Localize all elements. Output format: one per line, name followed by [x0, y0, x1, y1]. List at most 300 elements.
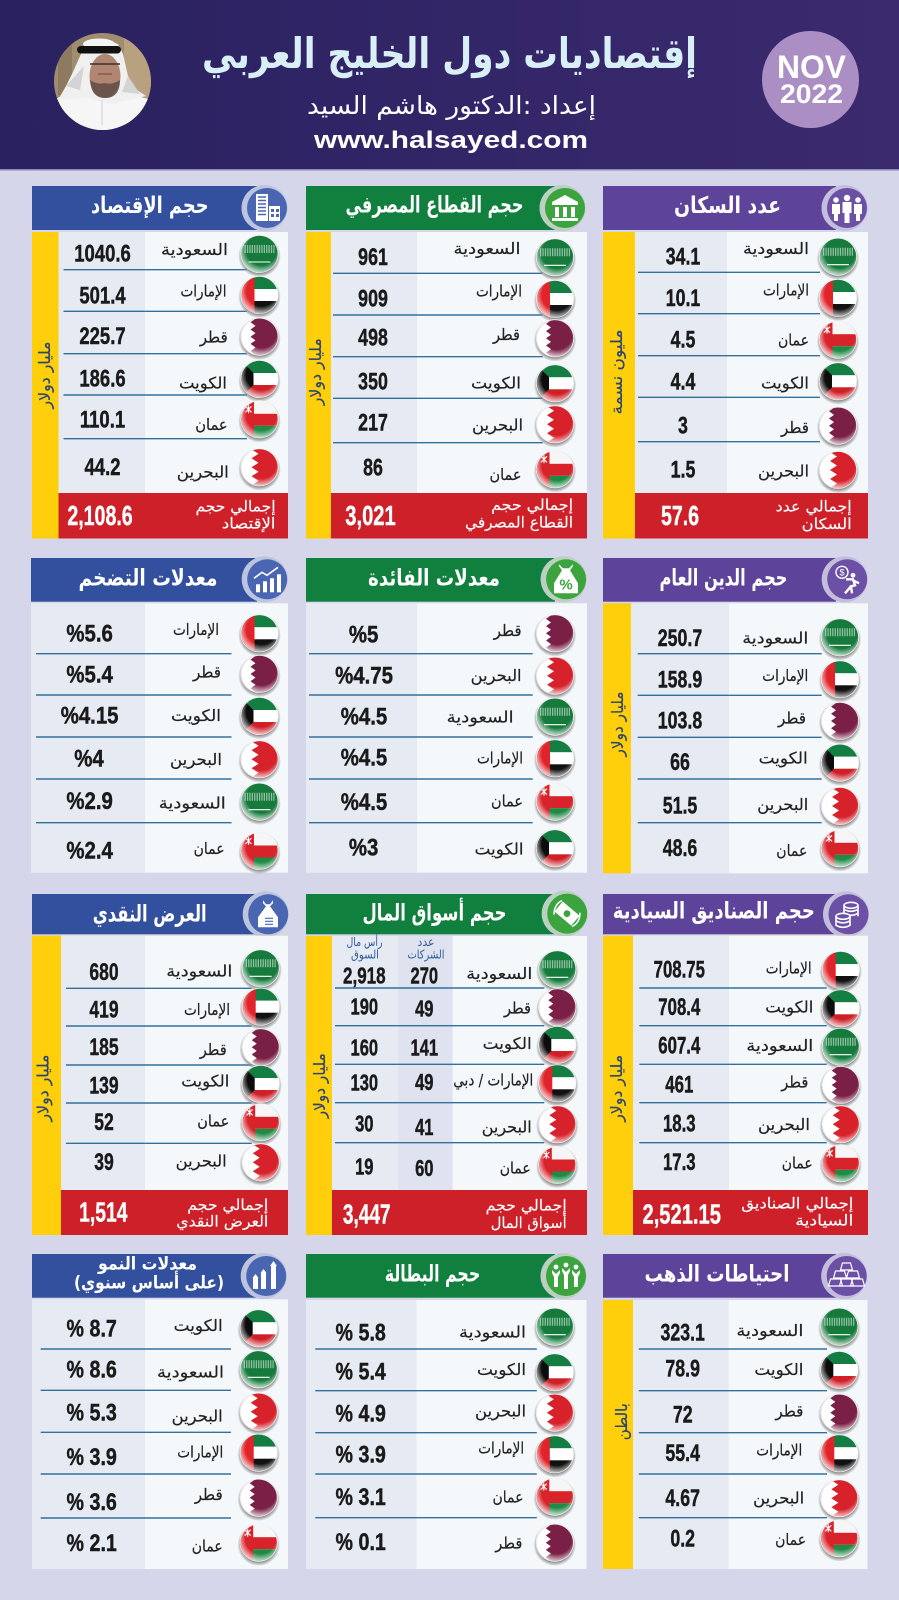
panel heading: معدلات التضخم	[78, 566, 218, 592]
row: الإمارات: الإمارات	[173, 620, 219, 640]
panel heading: حجم أسواق المال	[362, 897, 506, 927]
panel heading: العرض النقدي	[93, 902, 207, 928]
row: الإمارات: الإمارات	[762, 666, 808, 686]
row: الإمارات	[665, 1434, 860, 1476]
row: البحرين: 39	[94, 1149, 114, 1176]
row: الإمارات	[654, 951, 862, 993]
panel heading	[603, 556, 868, 602]
row: الكويت: %3	[349, 834, 378, 861]
panel heading	[306, 1253, 586, 1299]
row: عمان: 110.1	[80, 406, 125, 433]
unit label: مليار دولار	[306, 338, 326, 406]
row: الإمارات / دبي: 49	[415, 1070, 434, 1096]
row: الإمارات: %4.5	[341, 744, 387, 771]
column heading: companies: عدد	[418, 935, 434, 949]
row: الإمارات: % 3.9	[67, 1443, 117, 1470]
row: البحرين	[665, 1479, 860, 1521]
row: الكويت: 78.9	[665, 1356, 700, 1382]
row: الإمارات: الإمارات	[177, 1442, 223, 1462]
row: الكويت: 139	[89, 1073, 119, 1099]
row: السعودية: 961	[358, 245, 388, 271]
row: البحرين: % 4.9	[336, 1400, 386, 1427]
row: البحرين: 41	[415, 1115, 434, 1141]
row: الكويت	[670, 744, 861, 786]
date badge	[762, 31, 859, 128]
row: الإمارات: الإمارات	[180, 282, 226, 302]
table body	[32, 1299, 288, 1569]
row: الإمارات: الإمارات	[184, 1000, 230, 1020]
row: الكويت: الكويت	[171, 706, 221, 726]
row: عمان: عمان	[197, 1112, 229, 1131]
panel: حجم البطالة	[306, 1253, 586, 1569]
row: قطر: قطر	[780, 1072, 808, 1092]
table body	[32, 232, 288, 538]
row: البحرين: % 5.3	[67, 1399, 117, 1426]
total bar: 57.6	[661, 501, 699, 532]
total bar: 2,521.15	[642, 1199, 721, 1230]
row: الكويت	[358, 364, 576, 406]
row: البحرين: البحرين	[753, 1488, 804, 1508]
row: البحرين	[336, 1394, 576, 1436]
row: البحرين: 1.5	[671, 457, 696, 483]
row: قطر	[358, 319, 576, 361]
row: السعودية: 2,918	[343, 964, 386, 989]
icon: debt runner: $	[839, 568, 845, 578]
row: السعودية: السعودية	[157, 1363, 224, 1383]
row: البحرين	[67, 1393, 280, 1435]
icon: percent bag: %	[559, 576, 573, 593]
row: عمان	[66, 832, 280, 874]
row: البحرين: البحرين	[176, 1152, 227, 1172]
icon: percent bag	[541, 556, 587, 602]
date badge: NOV	[777, 49, 847, 85]
row: قطر: 498	[358, 325, 388, 351]
row: قطر: قطر	[494, 1533, 522, 1553]
icon: buildings	[242, 185, 288, 231]
row: عمان	[663, 1144, 862, 1186]
row: عمان	[363, 450, 576, 492]
row: السعودية	[660, 1308, 860, 1350]
row: السعودية	[74, 235, 280, 277]
row: عمان	[94, 1103, 282, 1145]
row: البحرين: 18.3	[663, 1111, 696, 1137]
unit label: مليار دولار	[35, 341, 55, 409]
icon: gold bars	[821, 1253, 867, 1299]
row: عمان: عمان	[194, 839, 225, 858]
total bar: الإقتصاد	[222, 514, 276, 532]
row: السعودية	[341, 698, 576, 740]
row: الكويت: %4.15	[61, 702, 119, 729]
row: قطر: قطر	[777, 708, 806, 728]
total bar: 1,514	[79, 1197, 128, 1229]
row: السعودية: السعودية	[466, 964, 532, 984]
panel heading: حجم الدين العام	[660, 566, 788, 592]
row: البحرين	[663, 787, 861, 829]
row: عمان: %4.5	[341, 788, 387, 815]
total bar	[633, 1190, 868, 1235]
row: السعودية: 323.1	[660, 1320, 705, 1346]
row: البحرين	[355, 1105, 578, 1147]
row: الكويت	[67, 1309, 280, 1351]
row: قطر: 461	[665, 1071, 693, 1098]
row: الإمارات	[658, 660, 861, 702]
row: الإمارات	[67, 1434, 280, 1476]
row: البحرين: البحرين	[172, 1407, 223, 1427]
panel heading: معدلات الفائدة	[368, 566, 500, 592]
row: عمان	[341, 783, 576, 825]
row: عمان: 52	[94, 1109, 114, 1136]
row: السعودية: السعودية	[742, 628, 808, 648]
total bar: السيادية	[795, 1212, 853, 1230]
row: السعودية	[89, 949, 282, 991]
icon: coins	[823, 891, 869, 937]
panel heading	[306, 185, 586, 231]
row: البحرين: 44.2	[85, 454, 121, 481]
row: قطر: %5.4	[66, 661, 113, 688]
row: السعودية: السعودية	[743, 239, 809, 259]
row: قطر	[336, 1524, 576, 1566]
total bar: إجمالي حجم	[491, 496, 573, 515]
row: عمان: عمان	[776, 841, 807, 860]
row: الإمارات	[336, 1435, 576, 1477]
row: السعودية	[658, 1028, 862, 1070]
row: قطر: 49	[415, 997, 434, 1022]
row: الكويت: الكويت	[759, 748, 808, 768]
unit label: مليار دولار	[310, 1053, 330, 1119]
row: الإمارات: 501.4	[79, 282, 126, 309]
table body	[603, 936, 868, 1235]
row: الإمارات	[79, 276, 281, 318]
row: الكويت: 350	[358, 369, 388, 395]
panel: عدد السكان	[603, 185, 868, 538]
panel heading: حجم القطاع المصرفي	[346, 193, 524, 219]
panel heading: عدد السكان	[674, 193, 781, 219]
icon: growth bars	[241, 1253, 287, 1299]
row: الإمارات: 419	[89, 997, 119, 1023]
total bar: إجمالي حجم	[187, 1196, 268, 1215]
row: عمان: 0.2	[670, 1526, 695, 1552]
row: السعودية: %2.9	[66, 787, 113, 814]
row: البحرين	[671, 451, 859, 493]
row: الكويت: الكويت	[471, 373, 521, 393]
row: عمان	[336, 1478, 576, 1520]
row: قطر: % 3.6	[67, 1488, 117, 1515]
row: قطر: قطر	[492, 325, 520, 345]
table body	[306, 936, 587, 1235]
unit label: مليار دولار	[607, 1055, 627, 1123]
panel heading	[603, 891, 869, 937]
row: الكويت	[349, 829, 576, 871]
row: عمان: 48.6	[663, 836, 697, 862]
row: البحرين: البحرين	[471, 666, 522, 686]
row: عمان: عمان	[775, 1530, 806, 1549]
row: عمان: 19	[355, 1155, 374, 1180]
row: السعودية	[343, 950, 578, 992]
icon: people	[822, 185, 868, 231]
row: السعودية: %4.5	[341, 703, 387, 730]
table body	[31, 603, 288, 873]
portrait photo	[50, 33, 155, 132]
row: قطر: قطر	[194, 1485, 223, 1505]
row: عمان: 60	[415, 1156, 434, 1182]
row: قطر	[658, 702, 861, 744]
row: قطر	[89, 1028, 282, 1070]
total bar: القطاع المصرفي	[465, 513, 573, 532]
row: الإمارات	[666, 279, 859, 321]
row: الكويت	[665, 1351, 860, 1393]
total bar	[58, 493, 288, 538]
row: السعودية: السعودية	[161, 240, 228, 260]
row: السعودية: السعودية	[159, 793, 226, 813]
panel heading	[32, 1253, 287, 1299]
row: البحرين	[663, 1105, 862, 1147]
row: عمان: % 3.1	[336, 1483, 386, 1510]
total bar: إجمالي الصناديق	[741, 1194, 853, 1213]
row: عمان	[355, 1146, 578, 1188]
row: قطر: %5	[349, 621, 378, 648]
row: السعودية: السعودية	[447, 708, 514, 728]
panel heading	[603, 1253, 867, 1299]
row: الكويت	[658, 989, 862, 1031]
row: البحرين	[335, 657, 576, 699]
table body	[306, 603, 587, 873]
row: البحرين: البحرين	[482, 1117, 532, 1137]
row: السعودية: % 8.6	[67, 1355, 117, 1383]
row: عمان: عمان	[492, 1487, 524, 1506]
row: عمان: عمان	[490, 465, 522, 484]
row: الكويت: 66	[670, 750, 690, 776]
unit label: مليار دولار	[34, 1054, 54, 1122]
header banner	[0, 0, 899, 170]
panel: معدلات النمو	[32, 1253, 288, 1569]
row: الكويت: 141	[410, 1036, 438, 1061]
row: السعودية: 1040.6	[74, 240, 131, 267]
table body	[603, 603, 868, 873]
total bar: 3,447	[343, 1199, 391, 1230]
row: الكويت	[79, 360, 281, 402]
row: السعودية: 250.7	[658, 626, 702, 652]
row: السعودية	[67, 1350, 280, 1392]
row: الكويت: الكويت	[754, 1360, 803, 1380]
table body	[306, 232, 587, 538]
total bar	[61, 1190, 288, 1235]
panel heading	[32, 891, 289, 937]
row: قطر: 190	[350, 995, 378, 1020]
row: السعودية	[66, 783, 280, 825]
row: الإمارات: الإمارات	[763, 281, 809, 301]
row: الإمارات	[341, 739, 576, 781]
row: البحرين: البحرين	[472, 416, 523, 436]
row: قطر	[67, 1479, 280, 1521]
row: عمان: 86	[363, 455, 383, 481]
row: السعودية: السعودية	[459, 1322, 526, 1342]
unit label: بالطن	[612, 1403, 632, 1440]
row: قطر	[665, 1066, 862, 1108]
row: الإمارات	[358, 280, 576, 322]
total bar: السكان	[802, 515, 852, 533]
row: الإمارات	[89, 988, 282, 1030]
row: السعودية	[336, 1308, 576, 1350]
panel heading	[31, 556, 288, 602]
icon: debt runner	[822, 556, 868, 602]
panel heading	[306, 556, 587, 602]
row: الكويت: % 5.4	[336, 1357, 387, 1385]
title: إقتصاديات دول الخليج العربي	[202, 29, 697, 79]
row: البحرين: البحرين	[758, 1115, 810, 1135]
row: البحرين	[85, 448, 280, 490]
row: البحرين: البحرين	[758, 462, 809, 482]
row: عمان: عمان	[491, 792, 523, 811]
row: السعودية: 270	[410, 964, 438, 989]
panel: العرض النقدي	[32, 891, 289, 1235]
total bar: 2,108.6	[67, 501, 133, 532]
panel heading	[603, 185, 868, 231]
total bar: إجمالي حجم	[486, 1197, 567, 1216]
row: البحرين: 4.67	[665, 1486, 700, 1512]
panel: حجم الإقتصاد	[32, 185, 288, 538]
total bar: إجمالي عدد	[776, 498, 852, 517]
column heading: market cap	[346, 934, 383, 962]
row: البحرين: %4.75	[335, 662, 393, 689]
row: الكويت: الكويت	[765, 997, 813, 1017]
row: قطر: قطر	[774, 1402, 803, 1422]
row: السعودية	[358, 238, 576, 280]
row: السعودية: 34.1	[666, 244, 700, 270]
row: عمان	[670, 1519, 860, 1561]
row: قطر: % 0.1	[336, 1528, 386, 1555]
author line: إعداد :الدكتور هاشم السيد	[307, 91, 596, 121]
row: الإمارات: 158.9	[658, 667, 702, 693]
panel: معدلات التضخم	[31, 556, 288, 874]
row: الإمارات: الإمارات	[766, 958, 812, 978]
row: الإمارات: 708.75	[654, 957, 705, 983]
row: الكويت: الكويت	[477, 1360, 526, 1380]
row: السعودية: 680	[89, 959, 119, 986]
row: قطر: قطر	[199, 327, 228, 347]
row: عمان: 17.3	[663, 1149, 696, 1176]
icon: bank	[540, 185, 586, 231]
row: عمان: عمان	[782, 1153, 813, 1172]
row: الكويت: الكويت	[174, 1316, 223, 1336]
column heading: market cap: رأس مال	[346, 934, 383, 950]
row: الكويت: الكويت	[474, 839, 524, 859]
row: الكويت: الكويت	[181, 1072, 229, 1092]
row: السعودية: 607.4	[658, 1032, 701, 1059]
row: السعودية: % 5.8	[336, 1319, 386, 1346]
row: السعودية: السعودية	[166, 962, 232, 982]
panel heading	[32, 185, 288, 231]
table body	[603, 232, 868, 538]
row: السعودية: السعودية	[454, 239, 520, 259]
total bar: 3,021	[345, 501, 396, 532]
panel heading: حجم الصناديق السيادية	[613, 898, 815, 924]
icon: rising chart	[242, 556, 288, 602]
total bar: أسواق المال	[491, 1213, 567, 1232]
row: الإمارات / دبي: الإمارات / دبي	[453, 1071, 533, 1091]
row: الكويت: 708.4	[658, 994, 701, 1021]
row: السعودية: السعودية	[736, 1321, 803, 1341]
table body	[32, 936, 288, 1235]
row: عمان: عمان	[500, 1158, 531, 1177]
column heading: companies: الشركات	[408, 947, 444, 962]
row: الكويت: الكويت	[483, 1034, 532, 1054]
row: عمان	[663, 829, 861, 871]
row: قطر	[79, 318, 281, 360]
row: الكويت: الكويت	[179, 373, 227, 393]
panel: احتياطات الذهب	[603, 1253, 868, 1569]
row: قطر	[349, 614, 576, 656]
row: قطر	[678, 407, 859, 449]
icon: money exchange	[542, 891, 588, 937]
row: البحرين: 30	[355, 1112, 374, 1137]
row: قطر: 3	[678, 413, 688, 439]
table body	[603, 1300, 868, 1569]
row: الكويت: 160	[350, 1036, 378, 1061]
panel: حجم أسواق المال	[306, 891, 588, 1235]
row: عمان	[671, 321, 859, 363]
row: البحرين: البحرين	[170, 750, 222, 770]
row: الإمارات: الإمارات	[478, 1438, 524, 1458]
row: الكويت	[336, 1353, 576, 1395]
row: الإمارات / دبي: 130	[350, 1071, 378, 1096]
panel: حجم الدين العام	[603, 556, 868, 873]
total bar: إجمالي حجم	[196, 498, 276, 517]
row: السعودية: السعودية	[746, 1036, 813, 1056]
row: السعودية	[658, 618, 861, 660]
row: الكويت: 186.6	[79, 365, 126, 392]
row: عمان: %2.4	[66, 837, 113, 864]
icon: money bag	[243, 891, 289, 937]
row: قطر	[350, 988, 578, 1030]
panel heading: (على أساس سنوي)	[74, 1270, 224, 1293]
row: قطر: 103.8	[658, 708, 702, 734]
row: قطر: 72	[673, 1402, 693, 1428]
row: البحرين	[94, 1143, 282, 1185]
row: الإمارات: الإمارات	[477, 748, 523, 768]
row: الكويت	[89, 1065, 282, 1107]
row: الكويت: الكويت	[761, 373, 809, 393]
row: عمان	[80, 400, 280, 442]
panel heading: معدلات النمو	[97, 1253, 197, 1274]
row: الإمارات: 55.4	[665, 1441, 700, 1467]
row: عمان	[67, 1524, 280, 1566]
date badge: 2022	[780, 79, 843, 109]
row: قطر: قطر	[780, 418, 809, 438]
row: الإمارات: 909	[358, 286, 388, 312]
row: الإمارات: %5.6	[66, 620, 113, 647]
icon: unemployed people	[540, 1253, 586, 1299]
row: البحرين: البحرين	[177, 462, 229, 482]
panel: حجم الصناديق السيادية	[603, 891, 869, 1235]
panel: حجم القطاع المصرفي	[306, 185, 587, 538]
row: الكويت: 4.4	[671, 369, 696, 395]
row: قطر: 225.7	[79, 323, 126, 350]
unit label: مليون نسمة	[607, 330, 627, 414]
row: قطر: قطر	[192, 663, 221, 683]
total bar	[635, 493, 868, 538]
panel heading: حجم الإقتصاد	[91, 193, 209, 219]
panel heading: احتياطات الذهب	[644, 1262, 790, 1288]
row: الكويت	[350, 1026, 578, 1068]
row: عمان: % 2.1	[67, 1529, 117, 1556]
row: عمان: عمان	[195, 415, 228, 434]
row: البحرين: البحرين	[757, 795, 808, 815]
row: البحرين	[358, 405, 576, 447]
row: البحرين: 51.5	[663, 793, 697, 819]
row: قطر: قطر	[503, 998, 531, 1018]
row: قطر: قطر	[199, 1040, 227, 1060]
row: البحرين: %4	[74, 745, 104, 772]
